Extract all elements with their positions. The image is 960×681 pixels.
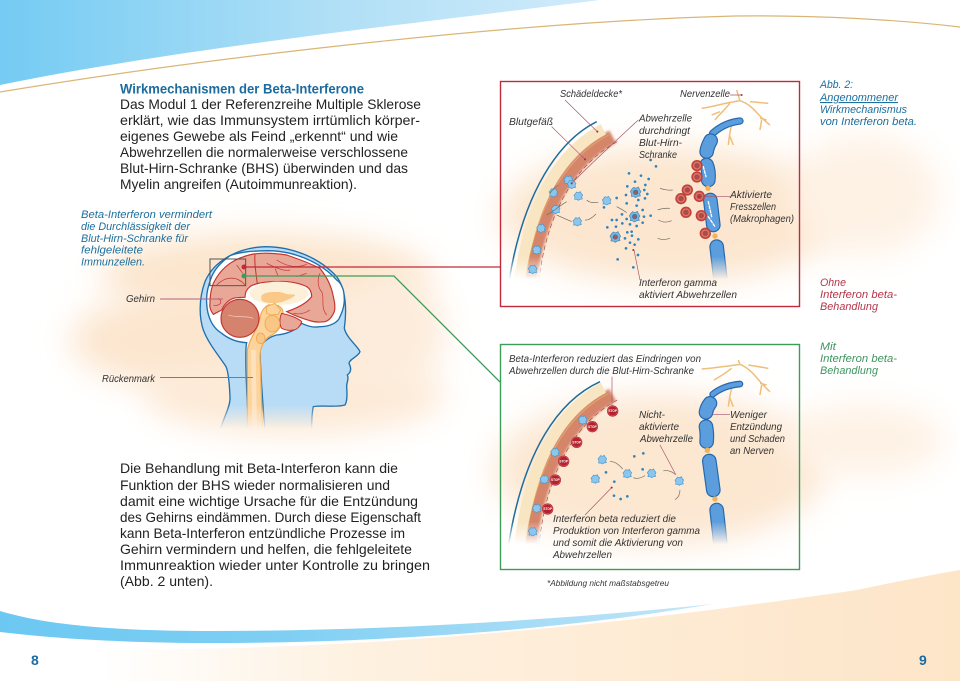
labels: (Makrophagen) <box>730 213 794 225</box>
labels: Abwehrzelle <box>638 112 692 124</box>
pointer: Gehirn: Gehirn <box>126 293 155 305</box>
text block: treatment: Funktion der BHS wieder normalisieren und <box>120 477 390 493</box>
immune cells <box>528 176 641 274</box>
labels: Weniger <box>730 409 767 421</box>
macrophages <box>675 160 711 239</box>
text block: intro: Myelin angreifen (Autoimmunreaktion). <box>120 176 357 192</box>
nerve fibre <box>703 121 740 287</box>
labels: Beta-Interferon reduziert das Eindringen von <box>509 353 701 365</box>
text block: intro: eigenes Gewebe als Feind „erkennt“ und wie <box>120 128 398 144</box>
lower brain lobe <box>280 313 302 330</box>
callout: Beta-Interferon effect: Immunzellen. <box>81 256 145 268</box>
cerebellum <box>221 299 259 337</box>
text block: intro: Abwehrzellen die normalerweise verschlossene <box>120 144 408 160</box>
label: without treatment: Behandlung <box>820 301 879 313</box>
page number: left: 8 <box>31 652 39 668</box>
figure caption: Abb. 2: von Interferon beta. <box>820 116 917 128</box>
labels: Produktion von Interferon gamma <box>553 525 700 537</box>
text block: treatment <box>120 460 430 589</box>
nerve cell dendrites <box>702 360 770 407</box>
labels: Blutgefäß <box>509 116 553 128</box>
labels: und somit die Aktivierung von <box>553 537 683 549</box>
migration trails <box>547 185 673 240</box>
labels <box>508 353 785 561</box>
figure caption: Abb. 2: Angenommener <box>819 92 899 104</box>
skull and vessel layers <box>508 382 617 548</box>
labels: Schädeldecke* <box>560 88 623 100</box>
decoration: top blue swoosh <box>0 0 600 85</box>
labels <box>509 88 794 301</box>
migration trails <box>610 462 680 500</box>
labels: Blut-Hirn- <box>639 137 682 149</box>
corpus callosum <box>250 282 308 305</box>
labels: Entzündung <box>730 421 782 433</box>
text block: treatment: damit eine wichtige Ursache für die Entzündung <box>120 493 418 509</box>
nerve cell dendrites <box>702 90 770 145</box>
labels: Nicht- <box>639 409 665 421</box>
pointers <box>585 377 730 515</box>
pointer: Gehirn <box>126 293 223 305</box>
labels: und Schaden <box>730 433 785 445</box>
decoration: bottom blue swoosh <box>0 604 713 643</box>
thalamus <box>262 292 295 303</box>
labels: Schranke <box>639 149 677 161</box>
panel: with treatment <box>500 344 800 570</box>
callout: Beta-Interferon effect: fehlgeleitete <box>81 244 143 256</box>
label: without treatment: Ohne <box>820 277 846 289</box>
text block: intro: erklärt, wie das Immunsystem irrtümlich körper- <box>120 112 420 128</box>
footnote: *Abbildung nicht maßstabsgetreu <box>547 578 669 588</box>
midbrain bumps <box>256 303 281 344</box>
callout: Beta-Interferon effect: die Durchlässigkeit der <box>81 221 191 233</box>
stop signs <box>542 405 618 515</box>
callout: Beta-Interferon effect: Blut-Hirn-Schranke für <box>81 233 189 245</box>
non-activated cells <box>591 455 684 485</box>
head and brain illustration <box>200 247 360 432</box>
connector: red line to panel <box>242 264 500 270</box>
text block: treatment: kann Beta-Interferon entzündliche Prozesse im <box>120 525 405 541</box>
labels: Nervenzelle <box>680 88 730 100</box>
text block: treatment: Die Behandlung mit Beta-Interferon kann die <box>120 460 398 476</box>
text block: treatment: des Gehirns eindämmen. Durch diese Eigenschaft <box>120 509 421 525</box>
text block: treatment: (Abb. 2 unten). <box>120 573 213 589</box>
decoration: bottom peach wave <box>100 570 960 681</box>
label: with treatment: Behandlung <box>820 365 879 377</box>
callout: Beta-Interferon effect: Beta-Interferon vermindert <box>81 209 213 221</box>
labels: an Nerven <box>730 445 774 457</box>
figure caption: Abb. 2: Abb. 2: <box>819 79 853 91</box>
labels: Abwehrzelle <box>639 433 693 445</box>
figure caption: Abb. 2: Wirkmechanismus <box>820 104 907 116</box>
text block: intro: Das Modul 1 der Referenzreihe Multiple Sklerose <box>120 96 421 112</box>
text block: intro <box>120 96 421 192</box>
skull and vessel layers <box>509 122 617 283</box>
label: with treatment <box>820 341 897 377</box>
connector: green line to panel <box>242 274 500 382</box>
labels: Interferon beta reduziert die <box>553 513 676 525</box>
label: without treatment: Interferon beta- <box>820 289 897 301</box>
labels: Fresszellen <box>730 201 776 213</box>
cerebrum <box>210 253 335 322</box>
interferon gamma dots <box>603 159 657 269</box>
detail square <box>210 259 246 286</box>
labels: Abwehrzellen durch die Blut-Hirn-Schranke <box>508 365 694 377</box>
page number: right: 9 <box>919 652 927 668</box>
label: with treatment: Mit <box>820 341 837 353</box>
brain folds <box>213 254 327 315</box>
labels: aktivierte <box>639 421 679 433</box>
nerve nodes <box>705 186 711 191</box>
nerve fibre <box>706 384 740 552</box>
nerve nodes <box>705 448 710 453</box>
spinal cord and brainstem <box>247 304 283 432</box>
figure caption: Abb. 2 <box>819 79 917 128</box>
label: without treatment <box>820 277 897 313</box>
white halo around brain <box>207 251 344 432</box>
labels: Abwehrzellen <box>552 549 612 561</box>
labels: Interferon gamma <box>639 277 717 289</box>
pointers <box>552 95 742 280</box>
callout: Beta-Interferon effect <box>81 209 213 268</box>
label: with treatment: Interferon beta- <box>820 353 897 365</box>
panel: without treatment <box>500 82 800 306</box>
interferon dots <box>605 452 645 500</box>
labels: Aktivierte <box>729 189 772 201</box>
pointer: Rückenmark: Rückenmark <box>102 373 156 385</box>
heading: Wirkmechanismen der Beta-Interferone <box>120 80 364 96</box>
labels: aktiviert Abwehrzellen <box>639 289 737 301</box>
vessel cells <box>528 416 587 536</box>
background: peach watercolor washes <box>70 135 945 545</box>
text block: intro: Blut-Hirn-Schranke (BHS) überwinden und das <box>120 160 408 176</box>
labels: durchdringt <box>639 125 691 137</box>
decoration: gold curve <box>0 16 960 92</box>
head silhouette <box>200 247 360 432</box>
text block: treatment: Immunreaktion wieder unter Kontrolle zu bringen <box>120 557 430 573</box>
text block: treatment: Gehirn vermindern und helfen, die fehlgeleitete <box>120 541 412 557</box>
